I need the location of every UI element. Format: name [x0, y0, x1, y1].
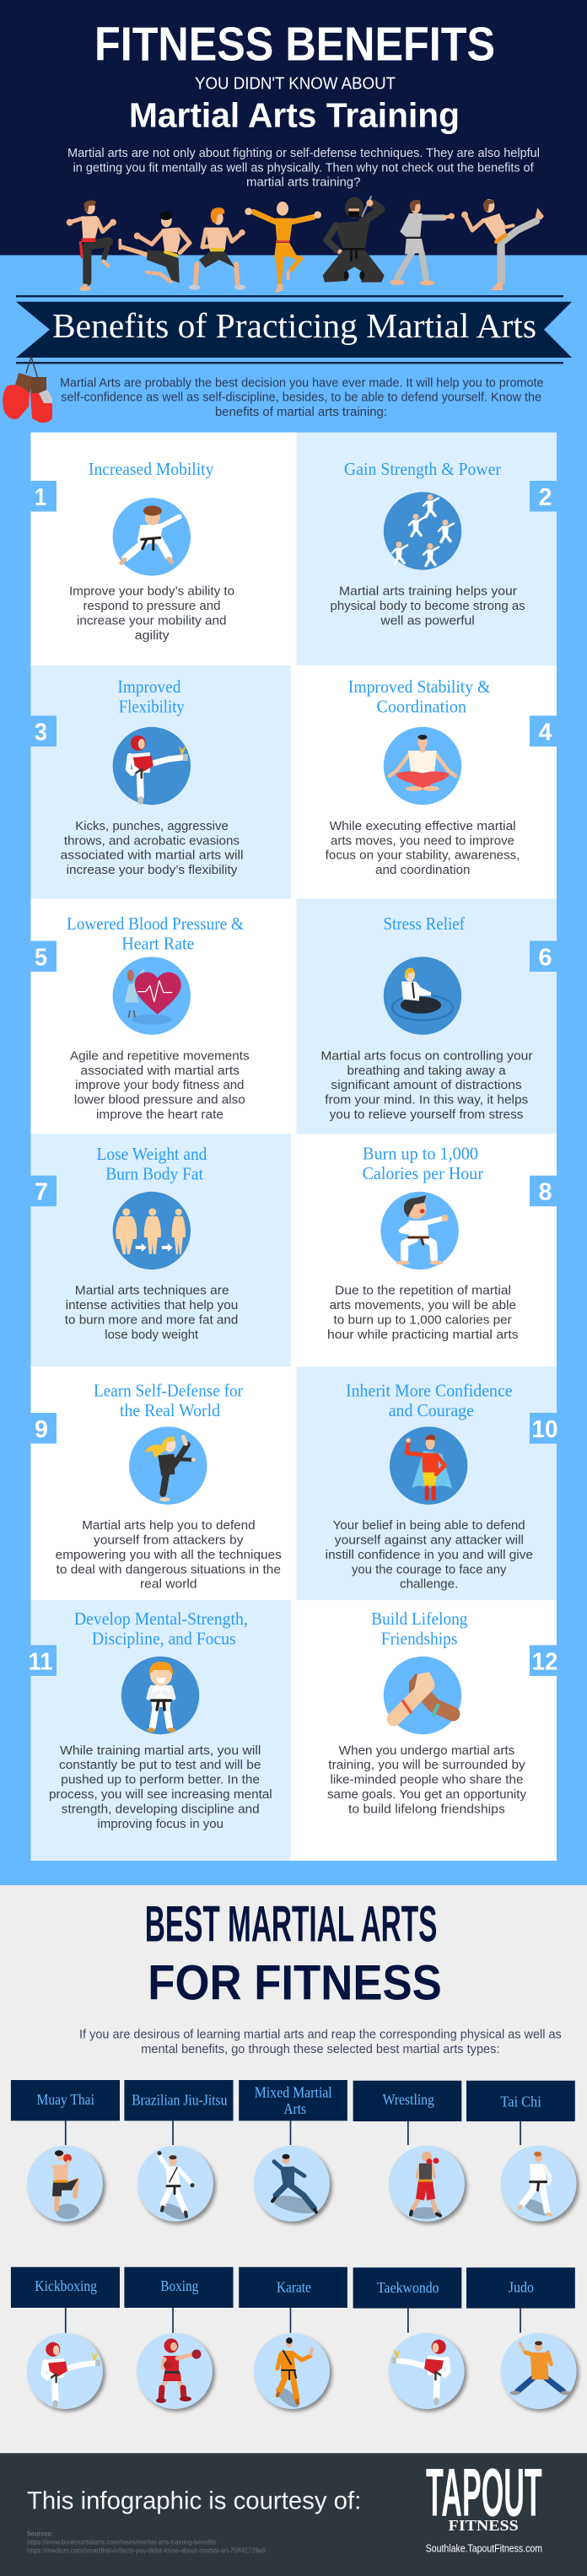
card: wrestling: Wrestling — [383, 2091, 434, 2108]
text block: challenge. — [400, 1577, 458, 1592]
heading: learn self-defense for the real world: Learn Self-Defense for — [94, 1380, 243, 1400]
text block: improve your body fitness and — [75, 1078, 244, 1092]
number tab 8 — [530, 1176, 557, 1206]
text block — [69, 584, 234, 643]
heading: build lifelong friendships — [371, 1609, 468, 1648]
title: Martial Arts Training — [129, 96, 460, 135]
heading: lose weight and burn body fat: Lose Weight and — [96, 1144, 207, 1164]
text block — [326, 1518, 533, 1592]
intro paragraph: martial arts training? — [246, 175, 360, 190]
card: boxing — [124, 2267, 233, 2412]
fighter 3 — [189, 207, 245, 290]
text block: best martial arts intro: mental benefits, go through these selected best martial arts types: — [141, 2042, 500, 2056]
card: mixed martial arts — [239, 2080, 347, 2224]
panel: benefit 1 — [30, 433, 297, 666]
card: kickboxing — [11, 2267, 120, 2412]
heading: learn self-defense for the real world — [94, 1380, 243, 1420]
footer: sources: https://medium.com/smartfind-in/facts-you-didnt-know-about-martial-art-75ff42728e9 — [27, 2547, 267, 2555]
panel: benefit 5 — [30, 899, 297, 1134]
intro text: benefits: self-confidence as well as self-discipline, besides, to be able to defend yourself. Know the — [61, 391, 541, 405]
text block: agility — [135, 628, 170, 643]
text block: to burn more and more fat and — [65, 1312, 238, 1327]
card: judo — [466, 2267, 579, 2412]
text block: same goals. You get an opportunity — [327, 1787, 526, 1802]
text block: lower blood pressure and also — [74, 1093, 245, 1107]
text block: Martial arts help you to defend — [82, 1518, 256, 1533]
intro paragraph: in getting you fit mentally as well as physically. Then why not check out the benefits of — [73, 160, 534, 175]
card: muay thai: Muay Thai — [37, 2091, 94, 2108]
text block: real world — [140, 1577, 197, 1592]
text block: and coordination — [375, 863, 471, 877]
icon: smiling karate boy — [121, 1657, 199, 1734]
panel: benefit 3 — [30, 666, 290, 899]
text block — [70, 1048, 250, 1122]
number tab 10: 10 — [531, 1416, 558, 1443]
text block: to build lifelong friendships — [348, 1802, 505, 1816]
text block: Due to the repetition of martial — [335, 1284, 511, 1298]
heading: improved stability and coordination — [348, 676, 490, 716]
fighter 5 — [323, 197, 385, 283]
heading: improved flexibility: Improved — [117, 676, 181, 697]
number tab 2 — [530, 481, 557, 511]
text block: yourself against any attacker will — [335, 1533, 524, 1547]
text block: best martial arts intro — [79, 2028, 562, 2056]
text block — [65, 1284, 238, 1342]
footer: sources — [27, 2530, 267, 2555]
text block: arts moves, you need to improve — [331, 833, 514, 848]
title — [94, 18, 495, 135]
text block: Agile and repetitive movements — [70, 1048, 250, 1063]
number tab 4: 4 — [538, 719, 552, 746]
card: muay thai — [11, 2080, 120, 2224]
fighter 7 — [461, 199, 544, 290]
text block: associated with martial arts will — [61, 849, 243, 863]
text block: breathing and taking away a — [347, 1064, 506, 1078]
fighter 6 — [390, 200, 455, 285]
text block: Kicks, punches, aggressive — [75, 819, 229, 833]
card: karate — [239, 2267, 347, 2412]
intro text: benefits: Martial Arts are probably the best decision you have ever made. It will help you to promote — [60, 375, 543, 390]
icon: high kick — [113, 727, 191, 805]
heading: burn up to 1,000 calories per hour — [363, 1144, 483, 1183]
heading: improved stability and coordination: Coordination — [376, 696, 466, 716]
text block: improve the heart rate — [96, 1107, 223, 1122]
heading: burn up to 1,000 calories per hour: Burn up to 1,000 — [363, 1144, 478, 1164]
text block: focus on your stability, awareness, — [326, 849, 520, 863]
panel: benefit 4 — [290, 666, 557, 899]
text block: strength, developing discipline and — [62, 1802, 260, 1816]
icon: boxing gloves — [3, 357, 52, 423]
number tab 3 — [30, 715, 57, 746]
panel: benefit 2 — [297, 433, 557, 666]
panel: benefit 11 — [29, 1600, 290, 1861]
text block — [61, 819, 243, 877]
heading: improved flexibility — [117, 676, 185, 716]
heading: inherit more confidence and courage — [346, 1380, 513, 1420]
card: boxing: Boxing — [160, 2277, 198, 2294]
icon: meditation — [384, 727, 461, 805]
text block: While executing effective martial — [330, 819, 516, 833]
heading: build lifelong friendships: Build Lifelong — [371, 1609, 468, 1629]
text block: from your mind. In this way, it helps — [325, 1093, 528, 1107]
heading: best martial arts for fitness: FOR FITNESS — [148, 1956, 442, 2011]
text block: Martial arts focus on controlling your — [320, 1048, 533, 1063]
heading: stress relief: Stress Relief — [383, 913, 465, 934]
icon: karate kid — [113, 498, 191, 576]
text block: associated with martial arts — [80, 1064, 240, 1078]
title: FITNESS BENEFITS — [94, 18, 495, 72]
text block: yourself from attackers by — [94, 1533, 244, 1547]
heading: burn up to 1,000 calories per hour: Calories per Hour — [363, 1163, 483, 1183]
text block — [49, 1743, 272, 1831]
footer: sources: https://www.bookmartialarts.com/news/martial-arts-training-benefits — [27, 2539, 216, 2546]
icon: group training — [384, 492, 461, 570]
heading: build lifelong friendships: Friendships — [381, 1628, 457, 1648]
icon: weight loss figures — [113, 1192, 191, 1269]
text block: empowering you with all the techniques — [56, 1548, 282, 1562]
heading: inherit more confidence and courage: Inherit More Confidence — [346, 1380, 513, 1400]
number tab 3: 3 — [35, 719, 47, 746]
banner: benefits of practicing martial arts — [16, 295, 572, 364]
card: taekwondo — [353, 2267, 467, 2412]
number tab 12: 12 — [531, 1648, 558, 1675]
footer: sources: Sources: — [27, 2530, 53, 2538]
text block: well as powerful — [380, 614, 475, 628]
text block — [327, 1284, 519, 1342]
footer: courtesy line: This infographic is courtesy of: — [27, 2487, 361, 2514]
panel: benefit 9 — [30, 1366, 297, 1600]
text block — [56, 1518, 282, 1592]
text block: When you undergo martial arts — [339, 1743, 514, 1758]
text block: hour while practicing martial arts — [327, 1328, 519, 1342]
text block — [331, 584, 525, 628]
text block — [320, 1048, 533, 1122]
number tab 9 — [30, 1413, 57, 1444]
number tab 5 — [30, 941, 57, 972]
intro text: benefits: benefits of martial arts training: — [215, 405, 387, 419]
panel: benefit 6 — [297, 899, 557, 1134]
text block: instill confidence in you and will give — [326, 1548, 533, 1562]
text block: increase your body’s flexibility — [67, 863, 238, 877]
heading: improved stability and coordination: Improved Stability & — [348, 676, 490, 697]
card: mixed martial arts: Arts — [283, 2100, 306, 2117]
heading: inherit more confidence and courage: and Courage — [389, 1400, 474, 1420]
panel: benefit 7 — [30, 1134, 290, 1366]
text block: While training martial arts, you will — [60, 1743, 261, 1758]
text block: respond to pressure and — [83, 599, 221, 613]
heading: lowered blood pressure and heart rate: Heart Rate — [121, 933, 194, 953]
text block: process, you will see increasing mental — [49, 1787, 272, 1802]
logo: tapout fitness — [426, 2455, 542, 2555]
number tab 7: 7 — [35, 1179, 48, 1206]
text block: throws, and acrobatic evasions — [64, 833, 240, 848]
heading: increased mobility: Increased Mobility — [89, 459, 214, 479]
intro paragraph — [67, 146, 540, 190]
logo: tapout fitness: FITNESS — [449, 2517, 519, 2534]
card: judo: Judo — [509, 2278, 534, 2295]
heading: gain strength and power: Gain Strength & Power — [344, 459, 501, 479]
text block: intense activities that help you — [66, 1298, 238, 1312]
heading: develop mental-strength, discipline, and focus — [74, 1609, 248, 1648]
text block: lose body weight — [105, 1328, 199, 1342]
text block: you the courage to face any — [352, 1562, 507, 1576]
number tab 6 — [530, 941, 557, 972]
text block: to burn up to 1,000 calories per — [334, 1312, 512, 1327]
icon: businessman meditating — [384, 957, 461, 1035]
text block: best martial arts intro: If you are desirous of learning martial arts and reap the corresponding physical as well as — [79, 2028, 562, 2042]
text block — [327, 1743, 526, 1816]
number tab 11: 11 — [29, 1648, 52, 1675]
heading: best martial arts for fitness — [145, 1896, 442, 2011]
text block: physical body to become strong as — [331, 599, 525, 613]
heading: learn self-defense for the real world: the Real World — [120, 1400, 220, 1420]
number tab 1 — [30, 481, 57, 511]
heading: lose weight and burn body fat — [96, 1144, 207, 1184]
heading: lose weight and burn body fat: Burn Body Fat — [105, 1164, 203, 1184]
icon: blonde girl kicking — [129, 1426, 207, 1505]
text block: you to relieve yourself from stress — [330, 1107, 523, 1122]
number tab 4 — [530, 715, 557, 746]
number tab 5: 5 — [35, 945, 47, 972]
card: brazilian jiu-jitsu: Brazilian Jiu-Jitsu — [132, 2092, 227, 2109]
icon: superhero — [390, 1426, 467, 1505]
icon: punching boy — [380, 1192, 459, 1269]
heading: lowered blood pressure and heart rate: Lowered Blood Pressure & — [67, 913, 244, 934]
intro paragraph: Martial arts are not only about fighting or self-defense techniques. They are also helpful — [67, 146, 540, 160]
text block: Martial arts training helps your — [339, 584, 517, 598]
text block: training, you will be surrounded by — [328, 1758, 525, 1772]
fighter 1 — [67, 201, 116, 291]
card: tai chi — [466, 2081, 579, 2224]
fighter 2 — [120, 212, 190, 283]
icon: handshake — [384, 1657, 461, 1734]
number tab 7 — [30, 1176, 57, 1206]
title: YOU DIDN'T KNOW ABOUT — [195, 74, 396, 93]
number tab 8: 8 — [538, 1179, 552, 1206]
intro text: benefits — [60, 375, 543, 419]
panel: benefit 12 — [290, 1600, 558, 1861]
text block: improving focus in you — [97, 1817, 223, 1831]
card: wrestling — [353, 2081, 467, 2224]
text block: significant amount of distractions — [331, 1078, 522, 1092]
heading: develop mental-strength, discipline, and focus: Discipline, and Focus — [92, 1628, 236, 1648]
card: taekwondo: Taekwondo — [377, 2279, 439, 2296]
illustration: row of seven martial artists — [67, 197, 544, 293]
icon: heart and doctor — [113, 957, 191, 1035]
panel: benefit 10 — [297, 1366, 558, 1600]
text block: Your belief in being able to defend — [333, 1518, 525, 1533]
heading: develop mental-strength, discipline, and focus: Develop Mental-Strength, — [74, 1609, 248, 1629]
heading: lowered blood pressure and heart rate — [67, 913, 244, 953]
card: tai chi: Tai Chi — [500, 2093, 541, 2110]
text block: like-minded people who share the — [331, 1773, 523, 1787]
text block: arts movements, you will be able — [330, 1298, 516, 1312]
text block: increase your mobility and — [77, 614, 226, 628]
panel: benefit 8 — [290, 1134, 557, 1366]
text block: to deal with dangerous situations in the — [57, 1562, 281, 1576]
text block: constantly be put to test and will be — [59, 1758, 261, 1772]
text block: Martial arts techniques are — [75, 1284, 229, 1298]
number tab 1: 1 — [35, 484, 46, 511]
card: kickboxing: Kickboxing — [35, 2277, 97, 2294]
banner: benefits of practicing martial arts: Benefits of Practicing Martial Arts — [52, 306, 536, 345]
logo: tapout fitness: Southlake.TapoutFitness.com — [426, 2543, 542, 2555]
number tab 9: 9 — [35, 1416, 48, 1443]
number tab 2: 2 — [538, 484, 552, 511]
text block: pushed up to perform better. In the — [61, 1773, 260, 1787]
fighter 4 — [245, 202, 321, 293]
heading: improved flexibility: Flexibility — [119, 696, 185, 716]
number tab 6: 6 — [538, 945, 552, 972]
text block — [326, 819, 520, 877]
card: mixed martial arts: Mixed Martial — [255, 2084, 332, 2101]
card: karate: Karate — [277, 2278, 311, 2295]
card: brazilian jiu-jitsu — [124, 2080, 233, 2224]
text block: Improve your body’s ability to — [69, 584, 234, 598]
